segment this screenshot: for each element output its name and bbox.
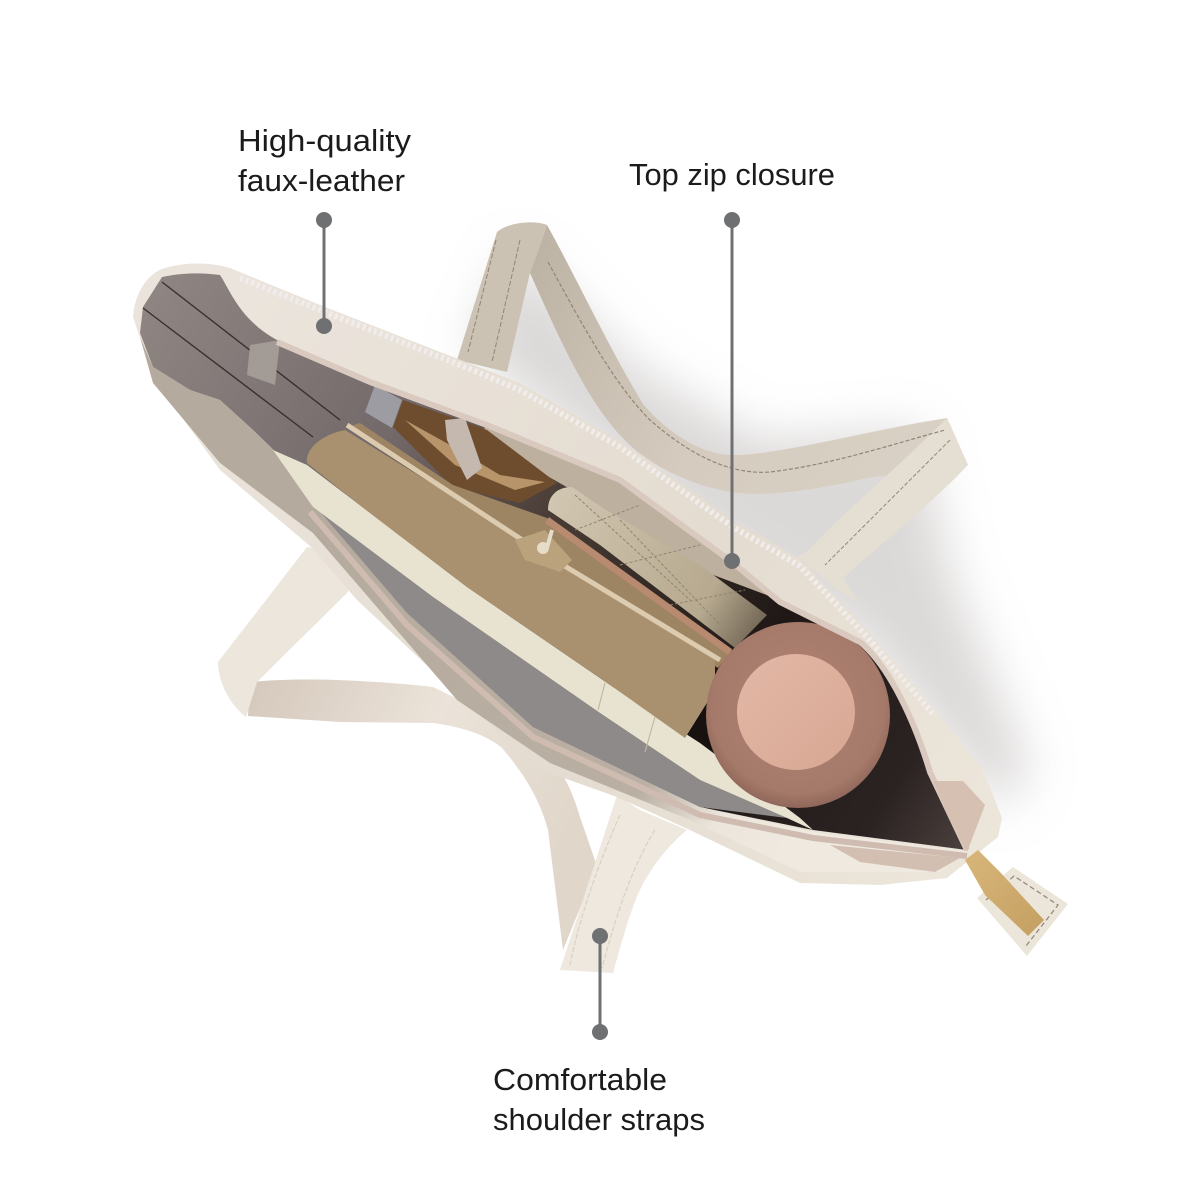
item: quilted wallet: [548, 487, 767, 648]
item: gold clasp: [515, 530, 572, 572]
item: dark gap: [680, 670, 790, 818]
item: clutch seam strip: [347, 425, 720, 660]
strap band: [248, 679, 597, 950]
item: compact strap tag: [445, 418, 482, 480]
item: gold compact: [393, 400, 557, 503]
label text: High-quality: [238, 123, 412, 158]
lower inner wall: [140, 337, 967, 872]
item: clutch flap: [347, 423, 732, 668]
item: wallet pink edge: [547, 520, 730, 652]
label text: [238, 123, 412, 198]
callout: comfortable shoulder straps: [493, 928, 705, 1137]
callout: top zip closure: Top zip closure: [629, 157, 835, 192]
callout: comfortable shoulder straps: shoulder straps: [493, 1102, 705, 1137]
strap: bottom shoulder strap: [560, 795, 687, 973]
strap return piece: [797, 418, 968, 600]
item: tan clutch: [307, 430, 715, 738]
callout: high-quality faux-leather: [238, 123, 412, 334]
strap arm: [218, 547, 370, 717]
item: tablet: [273, 450, 813, 830]
item: bottle cap: [737, 654, 855, 770]
item: pink bottle: [706, 622, 890, 808]
pocket light patch: [365, 385, 402, 428]
items in bag: [273, 400, 890, 830]
felt interior: [140, 273, 967, 850]
felt seam lines: [143, 282, 340, 437]
bag body: [133, 264, 1002, 885]
bag shadow: [470, 250, 1030, 810]
callout: top zip closure: [629, 157, 835, 569]
zipper edge: [240, 278, 985, 872]
callout: comfortable shoulder straps: Comfortable: [493, 1062, 667, 1097]
puller leather tab: [977, 867, 1068, 956]
zip stopper tab: [247, 340, 280, 385]
strap left rising piece: [457, 222, 547, 372]
zipper end cloth: [933, 781, 985, 852]
puller gold bar: [965, 850, 1044, 936]
upper wall below zip: [480, 423, 780, 600]
lower felt pocket: [290, 465, 787, 818]
strap: top back strap: [457, 222, 968, 600]
strap long loop: [530, 225, 968, 494]
label text: faux-leather: [238, 163, 405, 198]
zip puller: [965, 850, 1068, 956]
strap: left front strap: [218, 547, 597, 950]
